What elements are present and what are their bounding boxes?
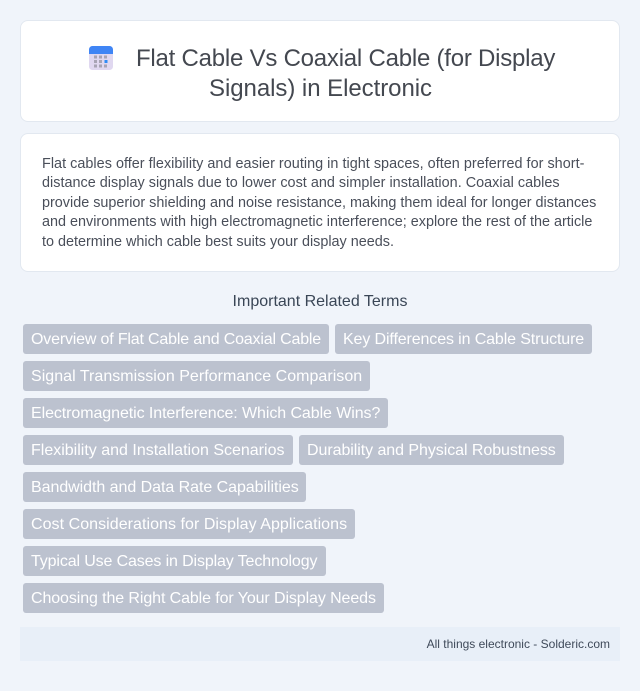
tag: flexibility [23, 435, 293, 465]
tag: structure: Key Differences in Cable Structure [343, 331, 584, 348]
tag: cost [23, 509, 355, 539]
panel: title card [20, 20, 620, 122]
tag: choosing: Choosing the Right Cable for Your Display Needs [31, 590, 376, 607]
tag: choosing [23, 583, 384, 613]
footer bar [20, 627, 620, 661]
title line 2: Signals) in Electronic [209, 75, 432, 102]
tag: use cases [23, 546, 326, 576]
text block: intro: and environments with high electromagnetic interference; explore the rest of the article [42, 214, 592, 230]
tag: bandwidth [23, 472, 306, 502]
text block: intro: distance display signals due to lower cost and simpler installation. Coaxial cables [42, 175, 560, 191]
tag: cost: Cost Considerations for Display Applications [31, 516, 347, 533]
panel: intro text card [20, 133, 620, 272]
tag: durability [299, 435, 564, 465]
tag: overview: Overview of Flat Cable and Coaxial Cable [31, 331, 321, 348]
heading: related terms: Important Related Terms [233, 293, 407, 310]
tag list [23, 324, 592, 613]
text block: intro: Flat cables offer flexibility and easier routing in tight spaces, often preferred for short- [42, 156, 584, 172]
footer text: All things electronic - Solderic.com [427, 637, 610, 651]
text block: intro: to determine which cable best suits your display needs. [42, 234, 394, 250]
tag: use cases: Typical Use Cases in Display Technology [31, 553, 317, 570]
tag: structure [335, 324, 592, 354]
tag: signal: Signal Transmission Performance Comparison [31, 368, 362, 385]
tag: EMI [23, 398, 388, 428]
text block: intro [42, 156, 596, 250]
icon: calendar app [89, 46, 113, 70]
tag: signal [23, 361, 370, 391]
title: Flat Cable Vs Coaxial Cable (for Display [136, 45, 555, 72]
tag: bandwidth: Bandwidth and Data Rate Capabilities [31, 479, 299, 496]
tag: durability: Durability and Physical Robustness [307, 442, 556, 459]
tag: overview [23, 324, 329, 354]
text block: intro: provide superior shielding and noise resistance, making them ideal for longer distances [42, 195, 596, 211]
tag: flexibility: Flexibility and Installation Scenarios [31, 442, 284, 459]
tag: EMI: Electromagnetic Interference: Which Cable Wins? [31, 405, 380, 422]
